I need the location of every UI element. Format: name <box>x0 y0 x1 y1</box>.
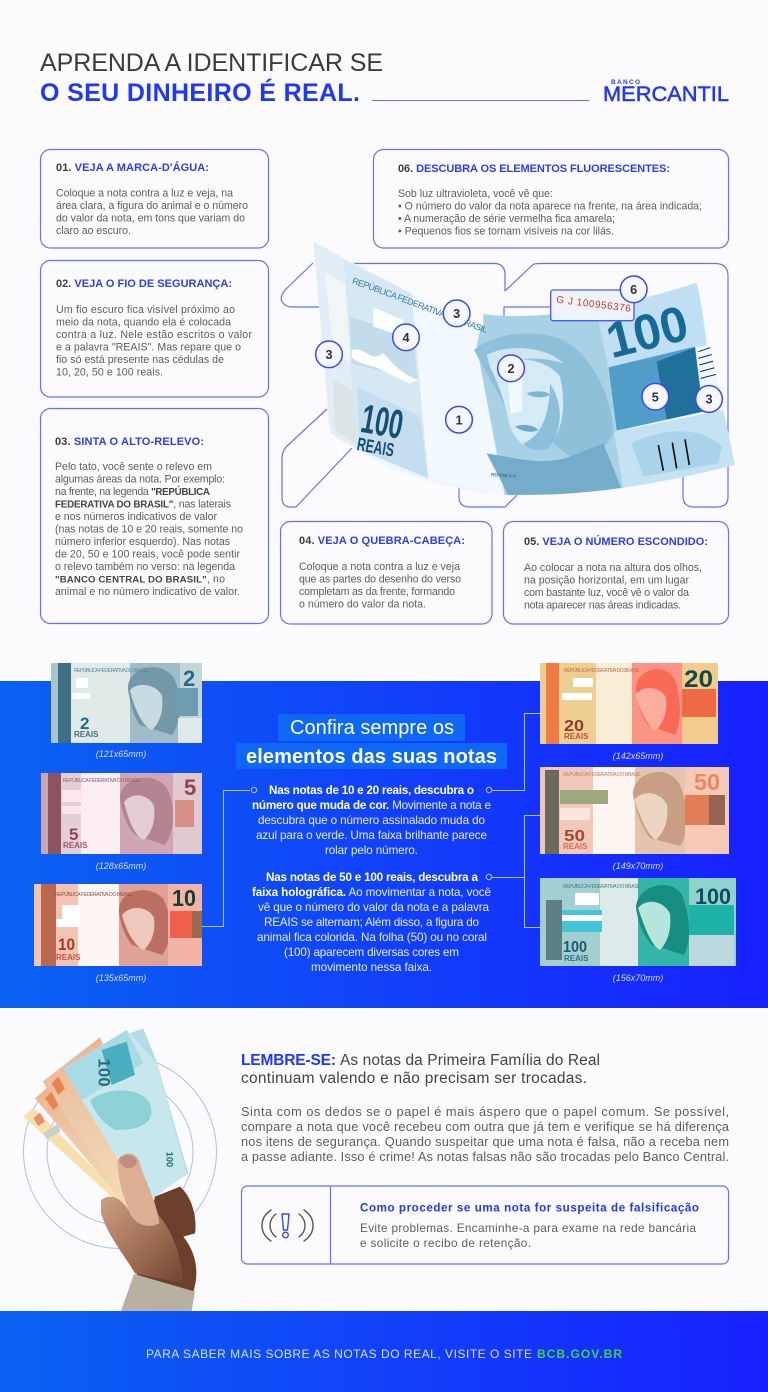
size label 156x70: (156x70mm) <box>613 973 663 983</box>
panel: 03 alto-relevo <box>40 408 268 624</box>
panel: 01 marca-d'água <box>40 150 268 248</box>
panel: 03 alto-relevo: o relevo também no verso: na legenda <box>55 561 235 573</box>
banknote illustration: 100 reais <box>314 242 735 496</box>
panel: 05 número escondido: com bastante luz, você vê o valor da <box>524 587 689 599</box>
banknote: 20 reais: REAIS <box>564 732 589 741</box>
panel: 04 quebra-cabeça: o número do valor da nota. <box>299 598 426 610</box>
illustration: hand holding banknotes <box>23 1028 196 1311</box>
panel: 03 alto-relevo: algumas áreas da nota. Por exemplo: <box>55 474 225 486</box>
panel: 01 marca-d'água: Coloque a nota contra a luz e veja, na <box>56 188 233 200</box>
panel: 06 elementos fluorescentes: Sob luz ultravioleta, você vê que: <box>398 188 553 200</box>
heading: confira sempre <box>236 714 507 769</box>
title: APRENDA A IDENTIFICAR SE <box>40 49 383 77</box>
text block: 50 e 100 reais: movimento nessa faixa. <box>311 961 432 974</box>
text block: 50 e 100 reais: faixa holográfica. Ao movimentar a nota, você <box>252 886 491 899</box>
title rule <box>372 100 589 101</box>
footer band <box>0 1311 768 1392</box>
banknote: 20 reais: 20 <box>564 718 584 735</box>
text block: 50 e 100 reais: vê que o número do valor da nota e a palavra <box>258 901 489 914</box>
heading: lembre-se <box>241 1052 600 1087</box>
text block: 50 e 100 reais: REAIS se alternam; Além disso, a figura do <box>264 916 479 929</box>
banknote: 20 reais <box>540 663 718 744</box>
panel: 02 fio de segurança: meio da nota, quando ela é colocada <box>56 316 231 328</box>
portrait bust <box>487 443 623 495</box>
text block: recommendations: nos itens de segurança. Quando suspeitar que uma nota é falsa, não a receba nem <box>241 1134 729 1149</box>
footer text: BCB.GOV.BR <box>537 1347 622 1361</box>
text block: 10 e 20 reais: número que muda de cor. Movimente a nota e <box>252 799 491 812</box>
callout: nota suspeita: Evite problemas. Encaminhe-a para exame na rede bancária <box>360 1221 696 1235</box>
panel: 04 quebra-cabeça: 04. VEJA O QUEBRA-CABEÇA: <box>299 535 465 547</box>
panel: 06 elementos fluorescentes: • A numeração de série vermelha fica amarela; <box>398 213 615 225</box>
banknote: 5 reais <box>41 773 202 854</box>
serial tag <box>551 290 634 321</box>
hand dark fingers <box>137 1187 196 1292</box>
value 100 reais <box>355 395 407 461</box>
number markers: 1 <box>455 413 463 427</box>
number markers: 6 <box>630 283 637 297</box>
value 100 large: 100 <box>601 295 694 369</box>
panel: 04 quebra-cabeça: Coloque a nota contra a luz e veja <box>299 561 460 573</box>
heading: confira sempre: Confira sempre os <box>290 717 454 739</box>
number markers: 3 <box>705 393 713 407</box>
banknote: 100 reais: 100 <box>563 939 587 956</box>
panel: 02 fio de segurança: fio só está presente nas cédulas de <box>56 354 224 366</box>
banknote: 10 reais: REAIS <box>56 953 81 962</box>
portrait face <box>490 359 563 450</box>
text block: 50 e 100 reais: (100) aparecem diversas cores em <box>284 946 459 959</box>
legend text on curve: REPÚBLICA FEDERATIVA DO BRASIL <box>352 278 486 333</box>
logo: Banco Mercantil: BANCO <box>611 79 640 86</box>
panel: 02 fio de segurança: contra a luz. Nele estão escritos o valor <box>56 329 252 341</box>
panel: 03 alto-relevo: e nos números indicativos de valor <box>55 511 217 523</box>
left strip <box>314 242 356 448</box>
panel: 06 elementos fluorescentes: • O número do valor da nota aparece na frente, na área indicada; <box>398 200 702 212</box>
banknote: 5 reais: 5 <box>184 775 196 800</box>
number markers: 3 <box>453 307 460 321</box>
logo: Banco Mercantil: MERCANTIL <box>603 83 729 106</box>
left band <box>344 259 428 478</box>
banknote: 5 reais: 5 <box>69 825 78 844</box>
panel: 01 marca-d'água: área clara, a figura do animal e o número <box>56 200 248 212</box>
panel: 05 número escondido: Ao colocar a nota na altura dos olhos, <box>524 562 702 574</box>
banknote: 50 reais <box>540 767 729 854</box>
panel: 04 quebra-cabeça <box>280 522 492 624</box>
banknote: 2 reais: 2 <box>183 666 195 691</box>
icon: alert <box>262 1210 313 1241</box>
banknote: 50 reais: REAIS <box>563 842 588 851</box>
small labels: REPÚBLICA <box>491 472 517 479</box>
number markers: 5 <box>652 390 659 404</box>
panel: 02 fio de segurança: e a palavra "REAIS". Mas repare que o <box>56 342 241 354</box>
text block: 10 e 20 reais: descubra que o número assinalado muda do <box>258 814 485 827</box>
banknote: 10 reais: 10 <box>58 935 75 954</box>
size label 149x70: (149x70mm) <box>613 861 663 871</box>
panel: 03 alto-relevo: "BANCO CENTRAL DO BRASIL", no <box>55 574 225 586</box>
concentric circles behind hand <box>24 1056 216 1248</box>
size label 142x65: (142x65mm) <box>613 751 663 761</box>
text block: recommendations <box>241 1104 730 1164</box>
text block: 50 e 100 reais: animal fica colorida. Na folha (50) ou no coral <box>257 931 487 944</box>
banknote: 20 reais: 20 <box>684 666 713 693</box>
panel: 03 alto-relevo: na frente, na legenda "REPÚBLICA <box>55 486 210 498</box>
panel: 05 número escondido <box>504 522 728 624</box>
right top panel <box>597 282 707 367</box>
heading: lembre-se: LEMBRE-SE: <box>241 1052 336 1069</box>
size label 135x65: (135x65mm) <box>96 973 146 983</box>
banknote: 10 reais: REPÚBLICA FEDERATIVA DO BRASIL <box>55 891 133 898</box>
panel: 02 fio de segurança: Um fio escuro fica visível próximo ao <box>56 304 235 316</box>
illustration: hand holding banknotes: 100 <box>94 1058 113 1087</box>
text block: 50 e 100 reais: Nas notas de 50 e 100 reais, descubra a <box>266 871 478 884</box>
panel: 03 alto-relevo: número inferior esquerdo). Nas notas <box>55 536 230 548</box>
banknote: 100 reais: REAIS <box>564 954 589 963</box>
panel: 03 alto-relevo: 03. SINTA O ALTO-RELEVO: <box>55 436 204 448</box>
panel: 03 alto-relevo: FEDERATIVA DO BRASIL", nas laterais <box>55 498 231 510</box>
text block: 10 e 20 reais: azul para o verde. Uma faixa brilhante parece <box>256 829 487 842</box>
panel: 02 fio de segurança: 02. VEJA O FIO DE SEGURANÇA: <box>56 278 232 290</box>
text block: recommendations: Sinta com os dedos se o papel é mais áspero que o papel comum. Se possível, <box>241 1104 729 1119</box>
blue band <box>0 681 768 1008</box>
panel: 03 alto-relevo: animal e no número indicativo de valor. <box>55 586 240 598</box>
title: O SEU DINHEIRO É REAL. <box>40 78 360 107</box>
right middle panel <box>608 347 703 431</box>
fan of notes <box>23 1107 130 1212</box>
text block: 50 e 100 reais <box>252 871 491 974</box>
value 100 reais: REAIS <box>355 433 396 460</box>
banknote: 5 reais: REPÚBLICA FEDERATIVA DO BRASIL <box>63 777 141 784</box>
sleeve <box>121 1274 195 1311</box>
illustration: hand holding banknotes: 100 <box>165 1152 175 1167</box>
title <box>40 49 383 107</box>
size label 128x65: (128x65mm) <box>96 861 146 871</box>
heading: confira sempre: elementos das suas notas <box>246 746 497 768</box>
number markers <box>316 276 722 433</box>
panel: 02 fio de segurança <box>40 260 268 397</box>
heading: lembre-se: As notas da Primeira Família do Real <box>340 1052 600 1069</box>
portrait panel <box>477 308 625 497</box>
heading: lembre-se: continuam valendo e não precisam ser trocadas. <box>241 1070 587 1087</box>
number markers: 3 <box>325 348 333 362</box>
panel: 01 marca-d'água: 01. VEJA A MARCA-D'ÁGUA: <box>56 161 209 174</box>
banknote: 2 reais: 2 <box>80 714 89 733</box>
panel: 03 alto-relevo: Pelo tato, você sente o relevo em <box>55 461 212 473</box>
text block: recommendations: a passe adiante. Isso é crime! As notas falsas não são trocadas pelo Banco Central. <box>241 1149 729 1164</box>
banknote: 100 reais: REPÚBLICA FEDERATIVA DO BRASIL <box>563 883 641 890</box>
panel: 02 fio de segurança: 10, 20, 50 e 100 reais. <box>56 366 163 378</box>
panel: 04 quebra-cabeça: completam as da frente, formando <box>299 586 455 598</box>
right bottom panel <box>614 410 737 490</box>
number markers: 4 <box>402 331 410 345</box>
panel: 05 número escondido: na posição horizontal, em um lugar <box>524 574 689 586</box>
banknote: 50 reais: 50 <box>564 828 585 845</box>
size label 121x65: (121x65mm) <box>96 749 146 759</box>
banknote: 20 reais: REPÚBLICA FEDERATIVA DO BRASIL <box>564 667 640 674</box>
callout: nota suspeita: Como proceder se uma nota for suspeita de falsificação <box>360 1202 699 1214</box>
panel: 04 quebra-cabeça: que as partes do desenho do verso <box>299 574 461 586</box>
centre watermark <box>412 294 428 478</box>
text block: 10 e 20 reais: rolar pelo número. <box>325 844 418 857</box>
connector lines <box>202 714 540 928</box>
banknote: 5 reais: REAIS <box>63 841 88 850</box>
connector frames around banknote <box>281 263 728 507</box>
text block: 10 e 20 reais <box>252 784 491 857</box>
panel: 01 marca-d'água: claro ao escuro. <box>56 225 131 237</box>
banknote: 10 reais: 10 <box>172 885 196 911</box>
panel: 01 marca-d'água: do valor da nota, em tons que variam do <box>56 212 245 224</box>
banknote: 2 reais <box>51 663 202 743</box>
portrait hair <box>474 333 613 458</box>
callout: nota suspeita: e solicite o recibo de retenção. <box>360 1236 531 1250</box>
panel: 05 número escondido: nota aparecer nas áreas indicadas. <box>524 600 681 612</box>
panel: 06 elementos fluorescentes <box>374 150 728 248</box>
text block: recommendations: compare a nota que você recebeu com outra que já tem e verifique se há diferença <box>241 1119 730 1134</box>
banknote: 100 reais: 100 <box>695 884 731 909</box>
footer text: PARA SABER MAIS SOBRE AS NOTAS DO REAL, VISITE O SITE <box>146 1347 532 1361</box>
banknote illustration: 100 reais: G J 100956376 <box>556 295 632 315</box>
panel: 03 alto-relevo: (nas notas de 10 e 20 reais, somente no <box>55 524 243 536</box>
panel: 06 elementos fluorescentes: • Pequenos fios se tornam visíveis na cor lilás. <box>398 226 614 238</box>
callout: nota suspeita <box>242 1186 728 1264</box>
banknote: 50 reais: REPÚBLICA FEDERATIVA DO BRASIL <box>563 771 641 778</box>
number markers: 2 <box>507 362 515 376</box>
hatch lines <box>698 347 716 379</box>
banknote: 2 reais: REPÚBLICA FEDERATIVA DO BRASIL <box>74 667 149 674</box>
banknote: 10 reais <box>34 884 202 966</box>
banknote: 50 reais: 50 <box>694 769 720 795</box>
panel: 05 número escondido: 05. VEJA O NÚMERO ESCONDIDO: <box>524 535 708 548</box>
banknote: 100 reais <box>540 878 736 966</box>
panel: 03 alto-relevo: de 20, 50 e 100 reais, você pode sentir <box>55 548 240 560</box>
text block: 10 e 20 reais: Nas notas de 10 e 20 reais, descubra o <box>269 784 474 797</box>
hand palm <box>101 1197 183 1283</box>
thumb <box>118 1153 159 1226</box>
banknote: 2 reais: REAIS <box>74 730 99 739</box>
panel: 06 elementos fluorescentes: 06. DESCUBRA OS ELEMENTOS FLUORESCENTES: <box>398 163 670 175</box>
value 100 reais: 100 <box>358 395 407 448</box>
note base <box>319 256 728 496</box>
